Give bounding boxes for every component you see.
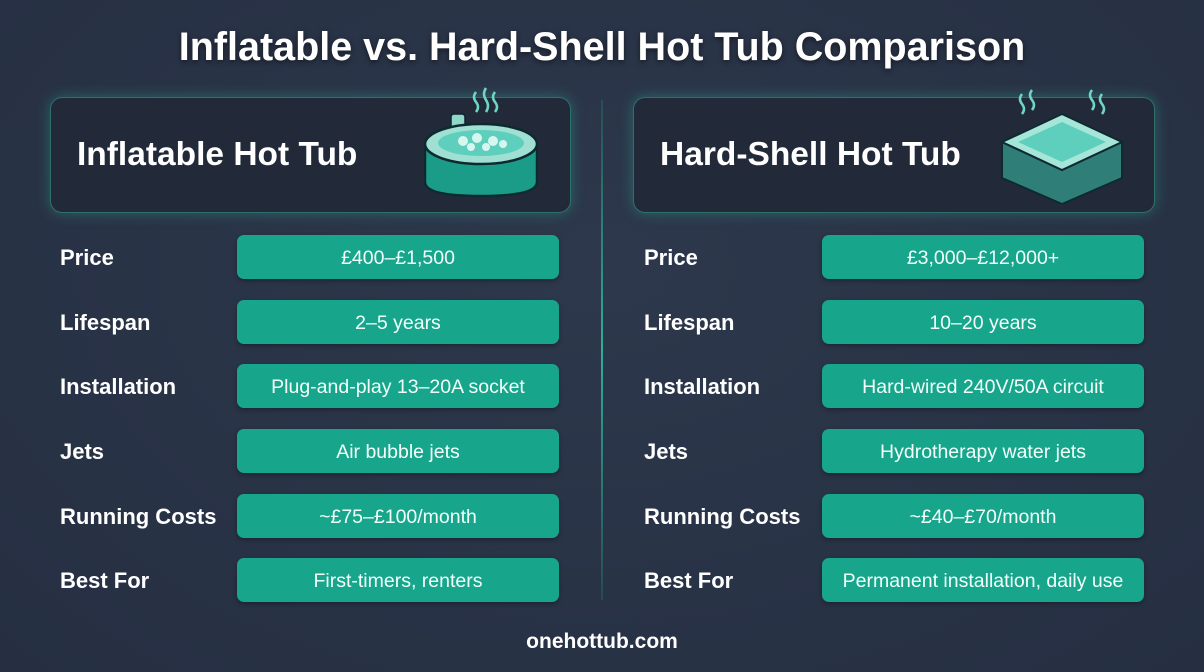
pill: lifespan: 2–5 years (355, 312, 441, 334)
pill: price (822, 235, 1144, 279)
row: price: Price (644, 245, 698, 270)
pill: installation: Hard-wired 240V/50A circuit (862, 376, 1104, 398)
row: installation: Installation (60, 374, 176, 399)
pill: best for: Permanent installation, daily use (843, 570, 1123, 592)
row: running costs: Running Costs (644, 504, 800, 529)
pill: running costs (237, 494, 559, 538)
row: price: Price (60, 245, 114, 270)
pill: best for (237, 558, 559, 602)
footer: onehottub.com (526, 630, 678, 653)
pill: lifespan: 10–20 years (929, 312, 1037, 334)
pill: jets (822, 429, 1144, 473)
left table (60, 235, 560, 604)
panel: hard-shell header (633, 97, 1155, 213)
divider (601, 100, 603, 600)
row: best for: Best For (60, 568, 149, 593)
pill: best for (822, 558, 1144, 602)
icon: hard-shell tub (1000, 89, 1124, 204)
row: installation: Installation (644, 374, 760, 399)
panel: inflatable header (50, 97, 571, 213)
pill: installation (237, 364, 559, 408)
pill: lifespan (237, 300, 559, 344)
row: jets: Jets (644, 439, 688, 464)
right table (644, 235, 1144, 604)
icon: inflatable tub (424, 87, 538, 198)
pill: running costs: ~£40–£70/month (910, 506, 1056, 528)
pill: installation (822, 364, 1144, 408)
pill: jets: Air bubble jets (336, 441, 460, 463)
row: lifespan: Lifespan (60, 310, 150, 335)
pill: price: £400–£1,500 (341, 247, 455, 269)
pill: jets (237, 429, 559, 473)
row: jets: Jets (60, 439, 104, 464)
title: Inflatable vs. Hard-Shell Hot Tub Comparison (179, 25, 1025, 69)
row: lifespan: Lifespan (644, 310, 734, 335)
panel: inflatable header: Inflatable Hot Tub (77, 136, 357, 173)
row: best for: Best For (644, 568, 733, 593)
pill: lifespan (822, 300, 1144, 344)
pill: running costs (822, 494, 1144, 538)
pill: running costs: ~£75–£100/month (319, 506, 477, 528)
panel: hard-shell header: Hard-Shell Hot Tub (660, 136, 961, 173)
pill: jets: Hydrotherapy water jets (880, 441, 1086, 463)
pill: installation: Plug-and-play 13–20A socket (271, 376, 525, 398)
pill: best for: First-timers, renters (313, 570, 482, 592)
row: running costs: Running Costs (60, 504, 216, 529)
pill: price (237, 235, 559, 279)
pill: price: £3,000–£12,000+ (907, 247, 1059, 269)
